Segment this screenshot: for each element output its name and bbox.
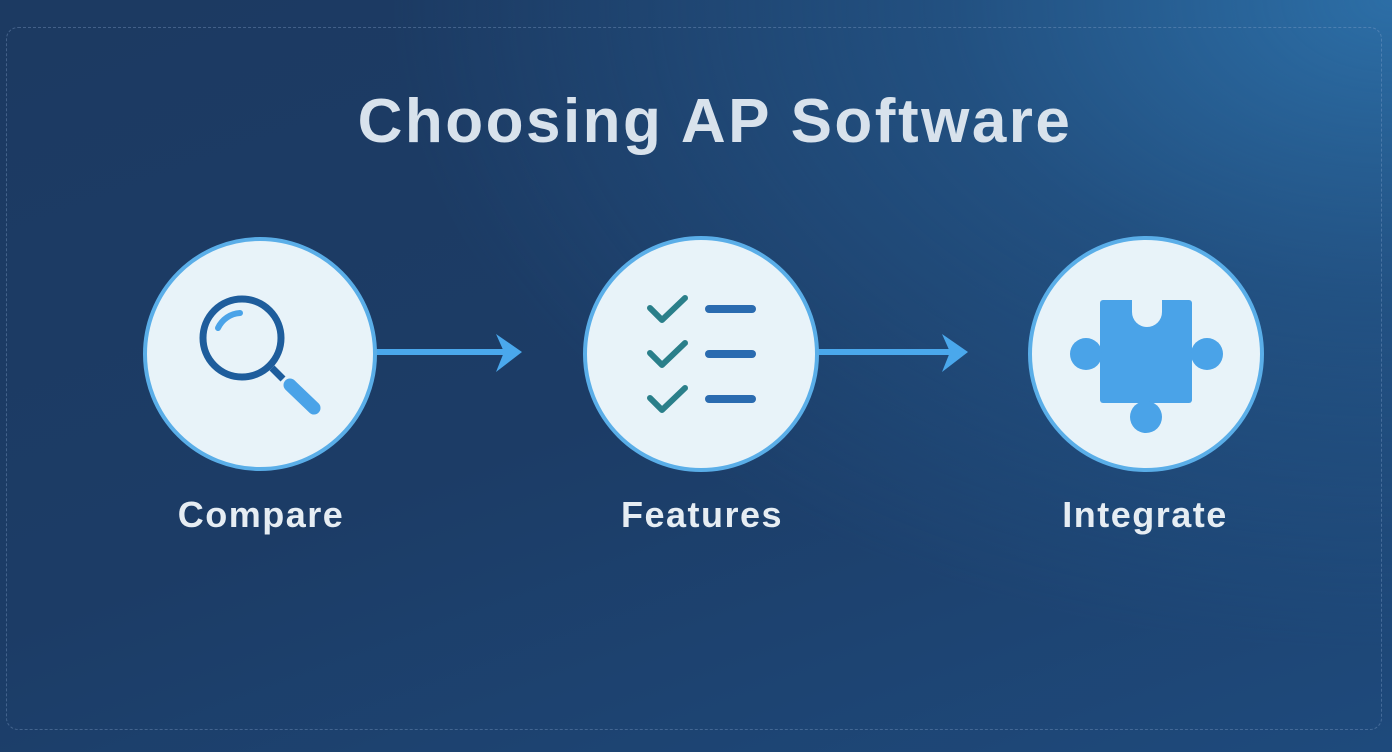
label: features: Features <box>621 494 783 535</box>
step: compare circle <box>145 239 375 469</box>
step: features circle <box>585 238 817 470</box>
icon: checklist <box>650 298 752 410</box>
icon: puzzle piece <box>1070 296 1223 433</box>
arrow: features to integrate <box>818 334 968 372</box>
label: compare: Compare <box>178 494 344 535</box>
arrow: compare to features <box>376 334 522 372</box>
title: Choosing AP Software <box>358 87 1072 156</box>
label: integrate: Integrate <box>1062 494 1228 535</box>
step: integrate circle <box>1030 238 1262 470</box>
icon: magnifying glass <box>203 299 314 408</box>
